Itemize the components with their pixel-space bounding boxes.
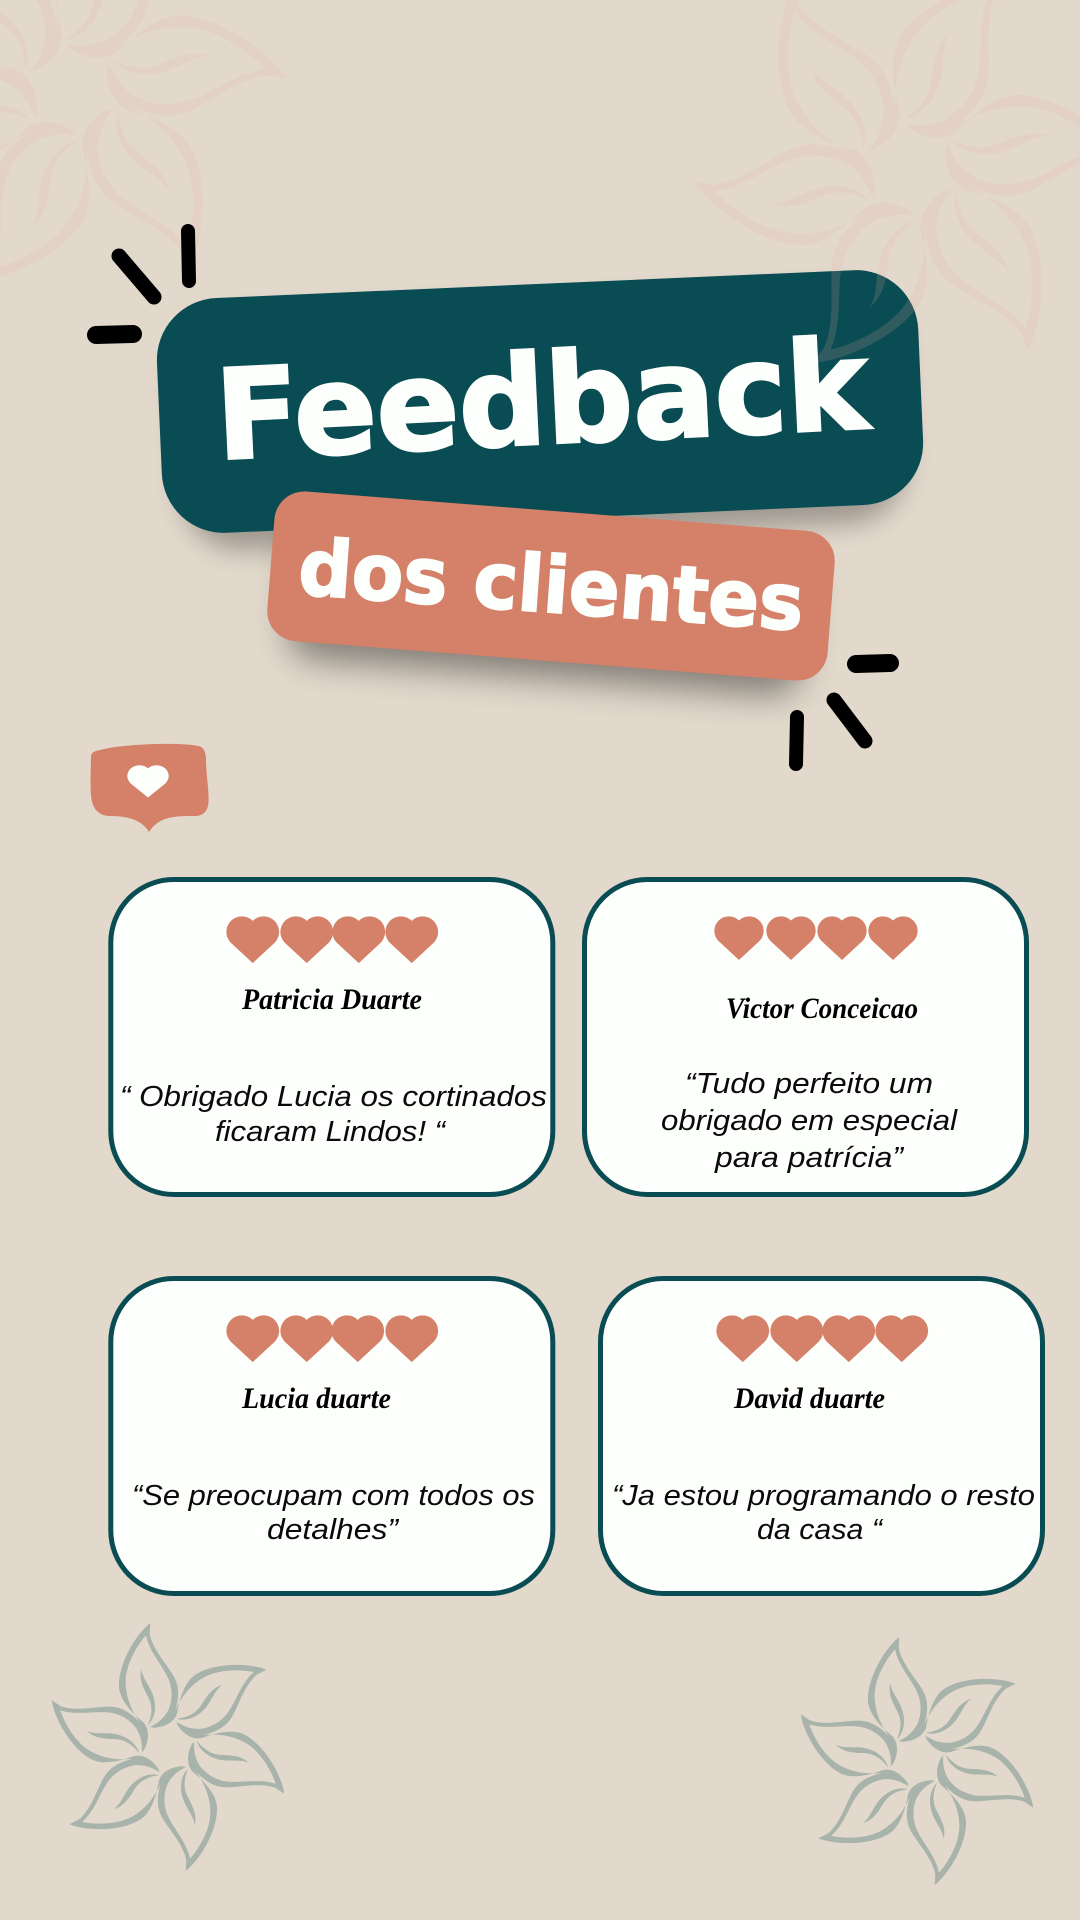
decorative flower: top right xyxy=(601,0,1080,476)
burst marks: bottom right xyxy=(796,663,890,764)
decorative flower: bottom right xyxy=(785,1637,1049,1885)
review quote: obrigado em especial xyxy=(661,1105,959,1137)
burst marks: top left xyxy=(96,231,189,335)
review quote xyxy=(120,1081,547,1148)
decorative flower: bottom left xyxy=(36,1623,300,1871)
review quote xyxy=(612,1480,1035,1546)
panel: Victor Conceicao review xyxy=(584,880,1026,1194)
hearts rating xyxy=(716,1315,928,1362)
review quote xyxy=(661,1068,959,1174)
review quote: “Se preocupam com todos os xyxy=(132,1480,535,1512)
reviewer name: Lucia duarte xyxy=(241,1382,391,1415)
title text: Feedback: Feedback xyxy=(213,314,873,489)
review quote xyxy=(132,1480,535,1546)
review quote: da casa “ xyxy=(757,1514,883,1546)
review quote: “Tudo perfeito um xyxy=(685,1068,933,1100)
decorative flower: top left xyxy=(0,0,378,393)
subtitle text: dos clientes: dos clientes xyxy=(296,523,807,649)
title banner shadow xyxy=(174,289,909,553)
reviewer name: David duarte xyxy=(733,1382,885,1415)
hearts rating xyxy=(226,1315,438,1362)
icon: like speech bubble xyxy=(91,744,209,832)
review quote: “Ja estou programando o resto xyxy=(612,1480,1035,1512)
review quote: detalhes” xyxy=(267,1514,399,1546)
review quote: “ Obrigado Lucia os cortinados xyxy=(120,1081,547,1113)
review quote: ficaram Lindos! “ xyxy=(215,1116,446,1148)
subtitle banner: dos clientes xyxy=(265,489,837,683)
panel: David duarte review xyxy=(600,1278,1042,1594)
hearts rating xyxy=(226,916,438,963)
subtitle banner shadow xyxy=(286,520,810,698)
title banner: Feedback xyxy=(154,267,926,536)
panel: Patricia Duarte review xyxy=(111,880,553,1194)
reviewer name: Victor Conceicao xyxy=(726,992,918,1025)
panel: Lucia duarte review xyxy=(111,1278,553,1594)
reviewer name: Patricia Duarte xyxy=(241,983,422,1016)
hearts rating xyxy=(714,916,918,960)
review quote: para patrícia” xyxy=(714,1142,904,1174)
